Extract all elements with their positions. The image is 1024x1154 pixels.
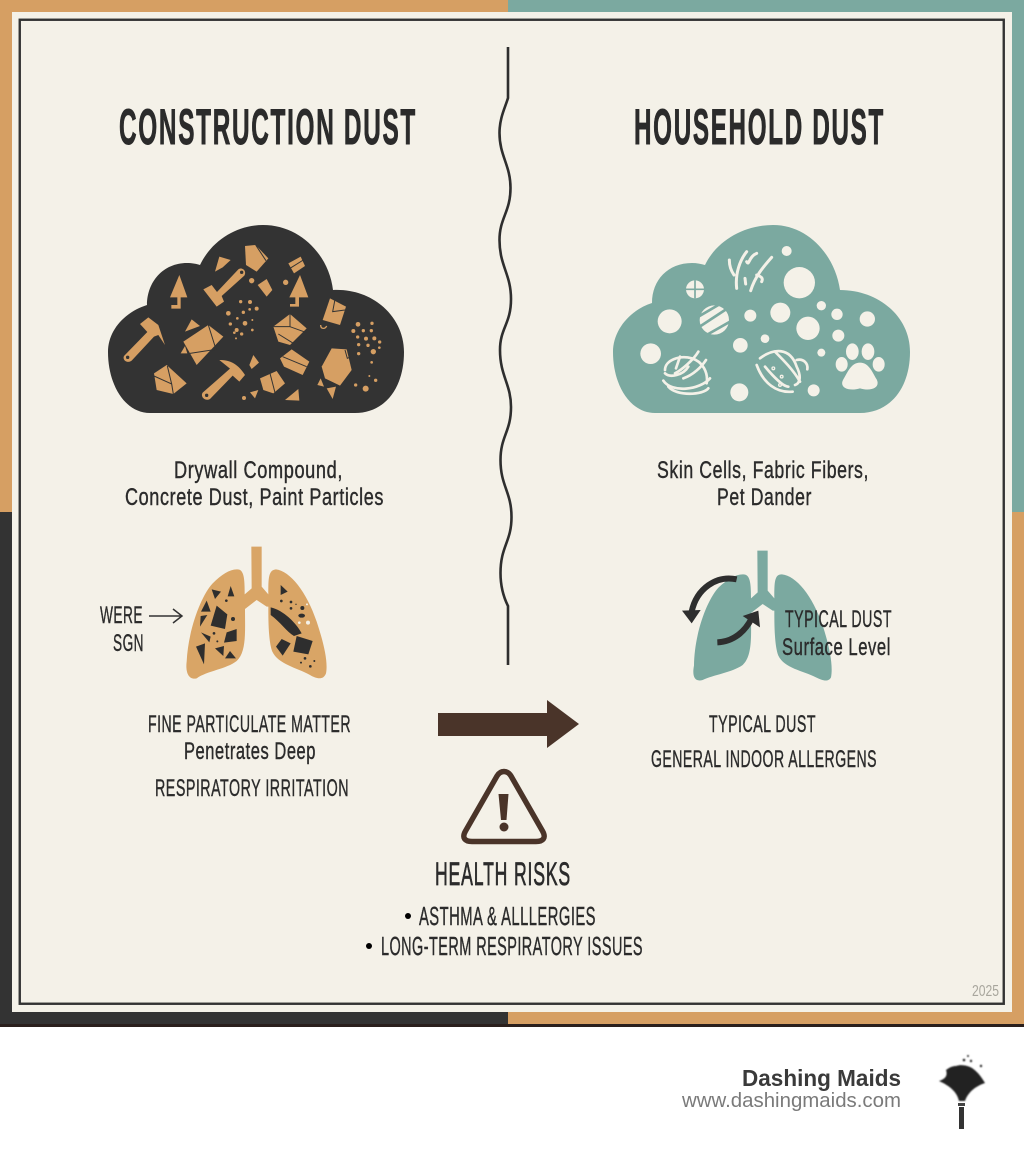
construction lungs xyxy=(186,547,327,679)
label with arrow: were sgn xyxy=(100,602,182,657)
trowels xyxy=(170,275,187,309)
construction effects text: FINE PARTICULATE MATTER xyxy=(148,711,351,738)
household effects text xyxy=(651,711,877,773)
construction materials text xyxy=(125,457,384,511)
household particle icons xyxy=(640,246,885,401)
brand text: Dashing Maids xyxy=(742,1065,901,1091)
household materials text: Skin Cells, Fabric Fibers, xyxy=(657,457,869,484)
brand text xyxy=(681,1065,901,1112)
construction effects text: RESPIRATORY IRRITATION xyxy=(155,775,349,802)
lung label: typical dust surface level xyxy=(782,606,892,661)
fabric fibres top xyxy=(729,252,772,291)
household materials text: Pet Dander xyxy=(717,484,812,511)
lung label: typical dust surface level: Surface Level xyxy=(782,634,891,661)
construction dust cloud xyxy=(108,225,404,413)
household effects text: TYPICAL DUST xyxy=(709,711,816,738)
lung label: typical dust surface level: TYPICAL DUST xyxy=(785,606,892,633)
icon: warning triangle xyxy=(464,772,544,842)
striped ball xyxy=(700,305,729,335)
brand text: www.dashingmaids.com xyxy=(681,1090,901,1112)
text: CONSTRUCTION DUST xyxy=(119,99,417,155)
construction materials text: Drywall Compound, xyxy=(174,457,343,484)
fragments xyxy=(215,257,231,272)
construction debris icons xyxy=(124,245,381,401)
lodged debris xyxy=(196,585,315,668)
skin cell particles xyxy=(782,246,792,256)
household dust cloud xyxy=(613,225,910,413)
label with arrow: were sgn: WERE xyxy=(100,602,143,629)
paw print xyxy=(846,343,859,360)
household lungs xyxy=(682,551,832,680)
health risks list: ASTHMA & ALLLERGIES xyxy=(419,901,596,931)
hammer left xyxy=(124,317,165,362)
health risks heading: HEALTH RISKS xyxy=(435,856,571,892)
construction effects text: Penetrates Deep xyxy=(184,738,316,765)
year: 2025 xyxy=(972,983,999,1000)
construction effects text xyxy=(148,711,351,802)
construction materials text: Concrete Dust, Paint Particles xyxy=(125,484,384,511)
fibre tangle left xyxy=(663,352,710,394)
health risks list xyxy=(366,901,643,961)
wavy centre divider xyxy=(500,47,512,665)
t tool xyxy=(203,268,245,307)
fibre tangle centre xyxy=(757,351,807,392)
crossed ball xyxy=(686,280,704,298)
airflow arrows xyxy=(682,579,760,642)
hammer lower xyxy=(202,360,245,400)
household materials text xyxy=(657,457,869,511)
label with arrow: were sgn: SGN xyxy=(113,630,144,657)
icon: feather duster xyxy=(939,1055,985,1129)
fragment crease lines xyxy=(154,245,351,394)
dust specks xyxy=(249,278,254,283)
centre arrow xyxy=(438,700,579,748)
health risks list: LONG-TERM RESPIRATORY ISSUES xyxy=(381,931,643,961)
